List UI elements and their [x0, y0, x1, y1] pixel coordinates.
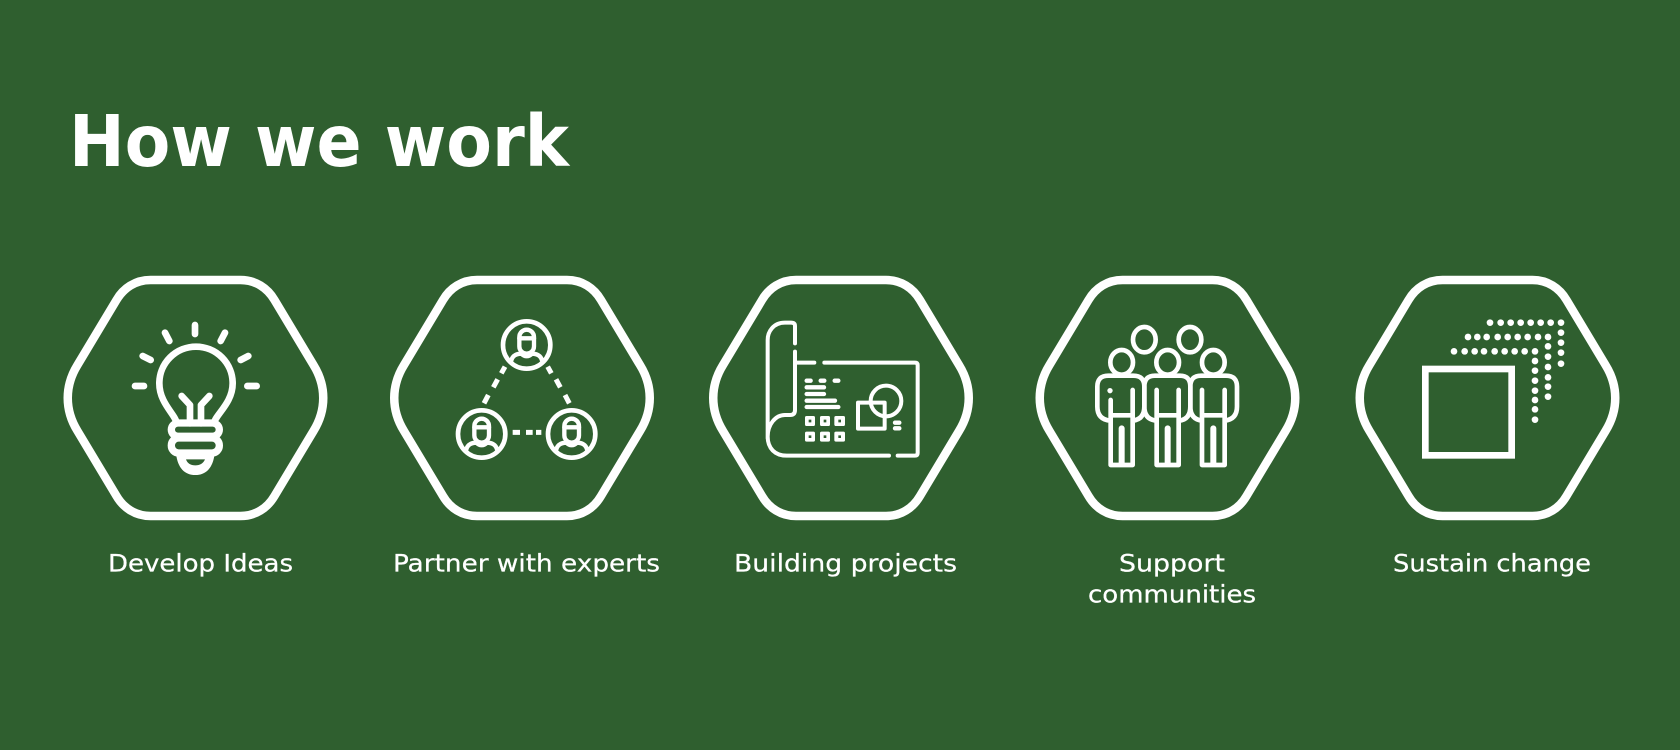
label: Develop Ideas: Develop Ideas — [108, 550, 293, 578]
panel: building projects — [713, 280, 969, 578]
panel: sustain change — [1360, 280, 1615, 578]
label: Building projects: Building projects — [734, 550, 957, 578]
label: Support communities: Support — [1119, 550, 1225, 578]
icon: connected people — [458, 321, 595, 458]
panel: partner with experts — [393, 280, 660, 578]
hexagon outline — [1040, 280, 1295, 516]
icon: blueprint — [768, 323, 918, 456]
panel: support communities — [1040, 280, 1295, 608]
icon: light bulb — [135, 325, 257, 475]
label: Partner with experts: Partner with experts — [393, 550, 660, 578]
hexagon outline — [1360, 280, 1615, 516]
label: Support communities — [1088, 550, 1256, 608]
hexagon outline — [68, 280, 323, 516]
icon: square with dotted corners — [1425, 319, 1564, 455]
hexagon outline — [394, 280, 650, 516]
label: Sustain change: Sustain change — [1393, 550, 1591, 578]
panel: develop ideas — [68, 280, 323, 578]
icon: group of people — [1097, 327, 1237, 465]
label: Support communities: communities — [1088, 580, 1256, 608]
hexagon outline — [713, 280, 969, 516]
title: How we work — [69, 100, 571, 183]
